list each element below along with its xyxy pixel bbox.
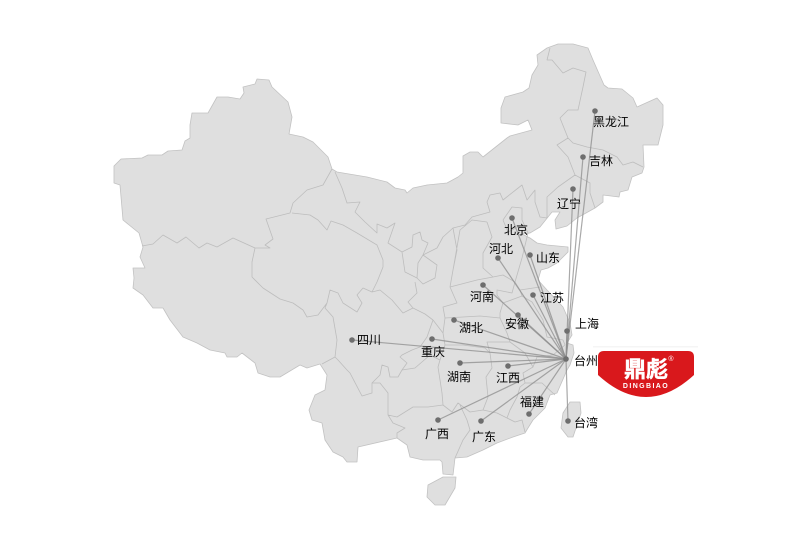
marker: 湖北	[451, 317, 483, 335]
mainland outline	[114, 44, 663, 475]
marker: 广东: 广东	[472, 430, 496, 444]
marker: 重庆: 重庆	[421, 345, 445, 359]
brand logo: 鼎彪: DINGBIAO	[623, 383, 669, 390]
marker: 江西: 江西	[496, 371, 520, 385]
map of China	[114, 44, 663, 505]
marker: 辽宁	[557, 186, 581, 211]
marker: 广西	[425, 417, 449, 441]
marker: 上海: 上海	[575, 316, 599, 331]
province borders	[142, 48, 643, 458]
marker: 安徽: 安徽	[505, 316, 529, 331]
marker: 台湾: 台湾	[574, 415, 598, 430]
marker: 江苏: 江苏	[540, 291, 564, 305]
marker: 四川: 四川	[357, 333, 381, 347]
marker: 台州	[563, 353, 598, 368]
marker: 上海	[564, 316, 599, 334]
marker: 黑龙江	[592, 108, 629, 129]
brand logo: 鼎彪	[593, 346, 698, 397]
marker: 北京	[504, 215, 528, 237]
brand logo: 鼎彪: ®	[668, 355, 674, 363]
marker: 辽宁: 辽宁	[557, 196, 581, 211]
marker: 台州: 台州	[574, 353, 598, 368]
marker: 江西	[496, 363, 520, 385]
marker: 北京: 北京	[504, 223, 528, 237]
marker: 湖南	[447, 360, 471, 384]
marker: 山东: 山东	[536, 251, 560, 265]
marker: 河北: 河北	[489, 242, 513, 256]
marker: 吉林: 吉林	[589, 154, 613, 168]
marker: 黑龙江: 黑龙江	[593, 115, 629, 129]
marker: 福建: 福建	[520, 394, 544, 409]
marker: 重庆	[421, 336, 445, 359]
marker: 湖南: 湖南	[447, 369, 471, 384]
marker: 河南: 河南	[470, 289, 494, 304]
connecting lines from Taizhou	[352, 111, 595, 421]
marker: 台湾	[565, 415, 598, 430]
brand logo: 鼎彪: 鼎彪	[624, 352, 668, 384]
Hainan island	[427, 477, 456, 505]
marker: 广东	[472, 418, 496, 444]
marker: 湖北: 湖北	[459, 320, 483, 335]
marker: 福建	[520, 394, 544, 417]
marker: 河南	[470, 282, 494, 304]
Taiwan island	[561, 402, 581, 437]
marker: 广西: 广西	[425, 427, 449, 441]
